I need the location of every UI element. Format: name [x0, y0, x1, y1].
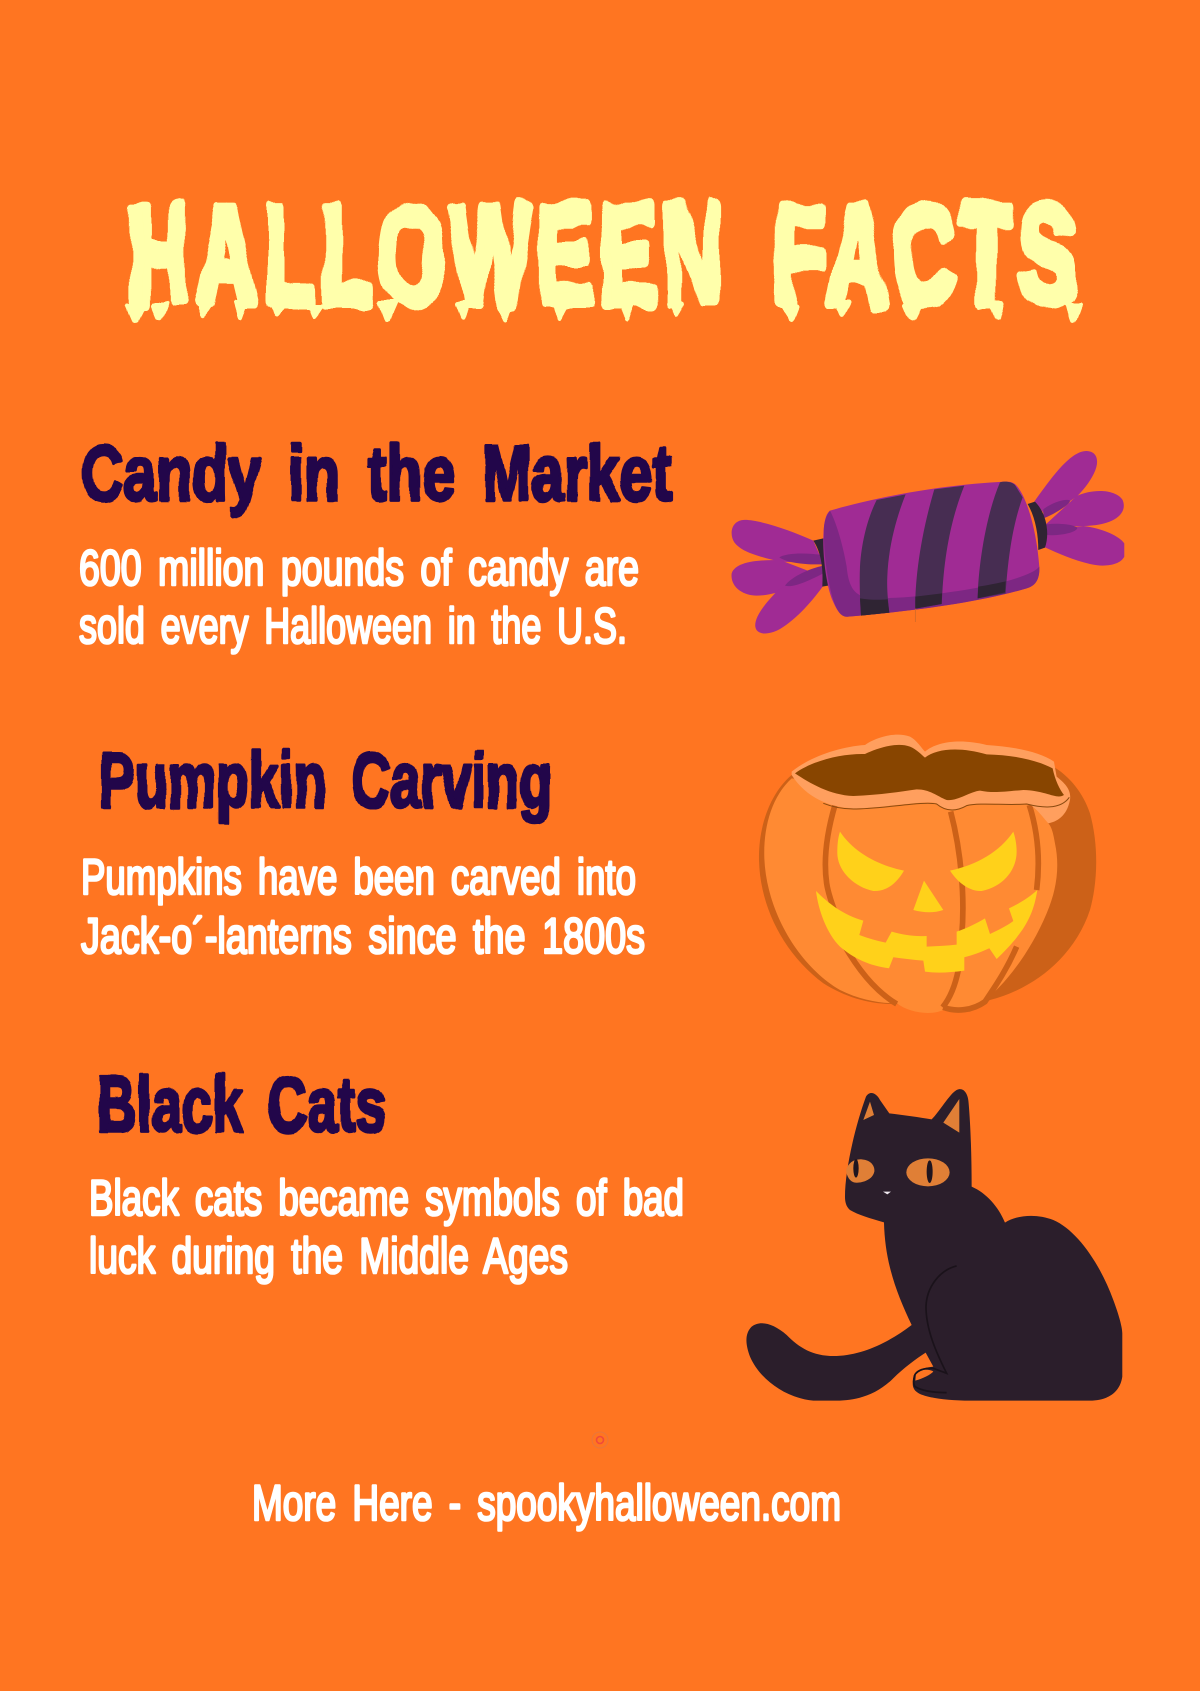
panel: candy in the market [79, 429, 1124, 654]
icon: jack-o'-lantern [759, 735, 1096, 1013]
heading: pumpkin: Pumpkin Carving [99, 736, 552, 824]
panel: black cats [89, 1060, 1122, 1401]
marker: small red circle [592, 1432, 608, 1448]
footer link text: More Here - spookyhalloween.com [252, 1475, 841, 1531]
heading: black cats: Black Cats [97, 1060, 386, 1148]
body text: candy [79, 540, 639, 654]
body text: pumpkin: Jack-o´-lanterns since the 1800s [81, 908, 645, 964]
body text: black cats [89, 1170, 684, 1284]
body text: black cats: Black cats became symbols of bad [89, 1170, 684, 1226]
body text: candy: 600 million pounds of candy are [79, 540, 639, 596]
icon: wrapped candy [732, 451, 1124, 633]
panel: pumpkin carving [81, 735, 1096, 1013]
body text: pumpkin [81, 849, 645, 964]
body text: black cats: luck during the Middle Ages [89, 1228, 568, 1284]
body text: pumpkin: Pumpkins have been carved into [81, 849, 636, 905]
body text: candy: sold every Halloween in the U.S. [79, 598, 627, 654]
icon: black cat [746, 1089, 1122, 1401]
heading: candy: Candy in the Market [81, 429, 672, 517]
